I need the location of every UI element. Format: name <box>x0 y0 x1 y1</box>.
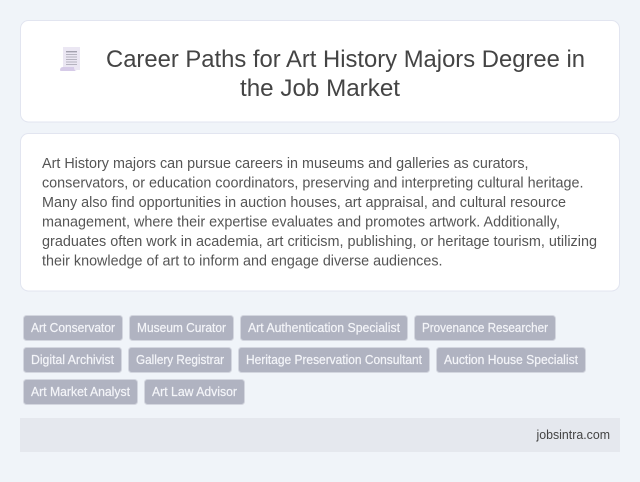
title <box>106 46 585 102</box>
title: Career Paths for Art History Majors Degree in <box>106 46 585 73</box>
tag: Art Market Analyst <box>24 380 138 404</box>
tag: Heritage Preservation Consultant <box>238 348 430 372</box>
tag: Art Authentication Specialist: Art Authentication Specialist <box>248 321 401 335</box>
footer bar <box>20 418 620 452</box>
tag: Heritage Preservation Consultant: Heritage Preservation Consultant <box>246 353 423 367</box>
tag: Digital Archivist: Digital Archivist <box>31 353 115 367</box>
tag: Art Conservator: Art Conservator <box>31 321 115 335</box>
tag: Provenance Researcher <box>414 316 556 340</box>
text block: description: Many also find opportunities in auction houses, art appraisal, and cultural resource <box>42 194 566 211</box>
tag list <box>24 316 586 404</box>
tag: Digital Archivist <box>24 348 122 372</box>
text block: description: management, where their expertise evaluates and promotes artwork. Additionally, <box>42 214 560 230</box>
footer text: site name: jobsintra.com <box>536 428 610 442</box>
tag: Art Market Analyst: Art Market Analyst <box>31 385 130 399</box>
tag: Auction House Specialist: Auction House Specialist <box>444 353 578 367</box>
icon: paper scroll <box>60 47 80 71</box>
text block: description: conservators, or education coordinators, preserving and interpreting cultural heritage. <box>42 174 584 192</box>
text block: description: Art History majors can pursue careers in museums and galleries as curators, <box>42 155 528 172</box>
text block: description: their knowledge of art to inform and engage diverse audiences. <box>42 252 442 270</box>
tag: Auction House Specialist <box>436 348 586 372</box>
tag: Museum Curator: Museum Curator <box>137 321 226 335</box>
tag: Provenance Researcher: Provenance Researcher <box>422 321 548 335</box>
tag: Art Conservator <box>24 316 122 340</box>
tag: Art Authentication Specialist <box>240 316 408 340</box>
title: the Job Market <box>240 75 400 102</box>
tag: Museum Curator <box>130 316 234 340</box>
panel: header card <box>20 20 620 122</box>
text block: description: graduates often work in academia, art criticism, publishing, or heritage tourism, utilizing <box>42 233 597 250</box>
tag: Gallery Registrar <box>128 348 232 372</box>
tag: Art Law Advisor: Art Law Advisor <box>152 385 237 399</box>
tag: Art Law Advisor <box>144 380 244 404</box>
text block: description <box>42 155 597 270</box>
tag: Gallery Registrar: Gallery Registrar <box>136 353 224 367</box>
panel: description card <box>20 134 620 291</box>
